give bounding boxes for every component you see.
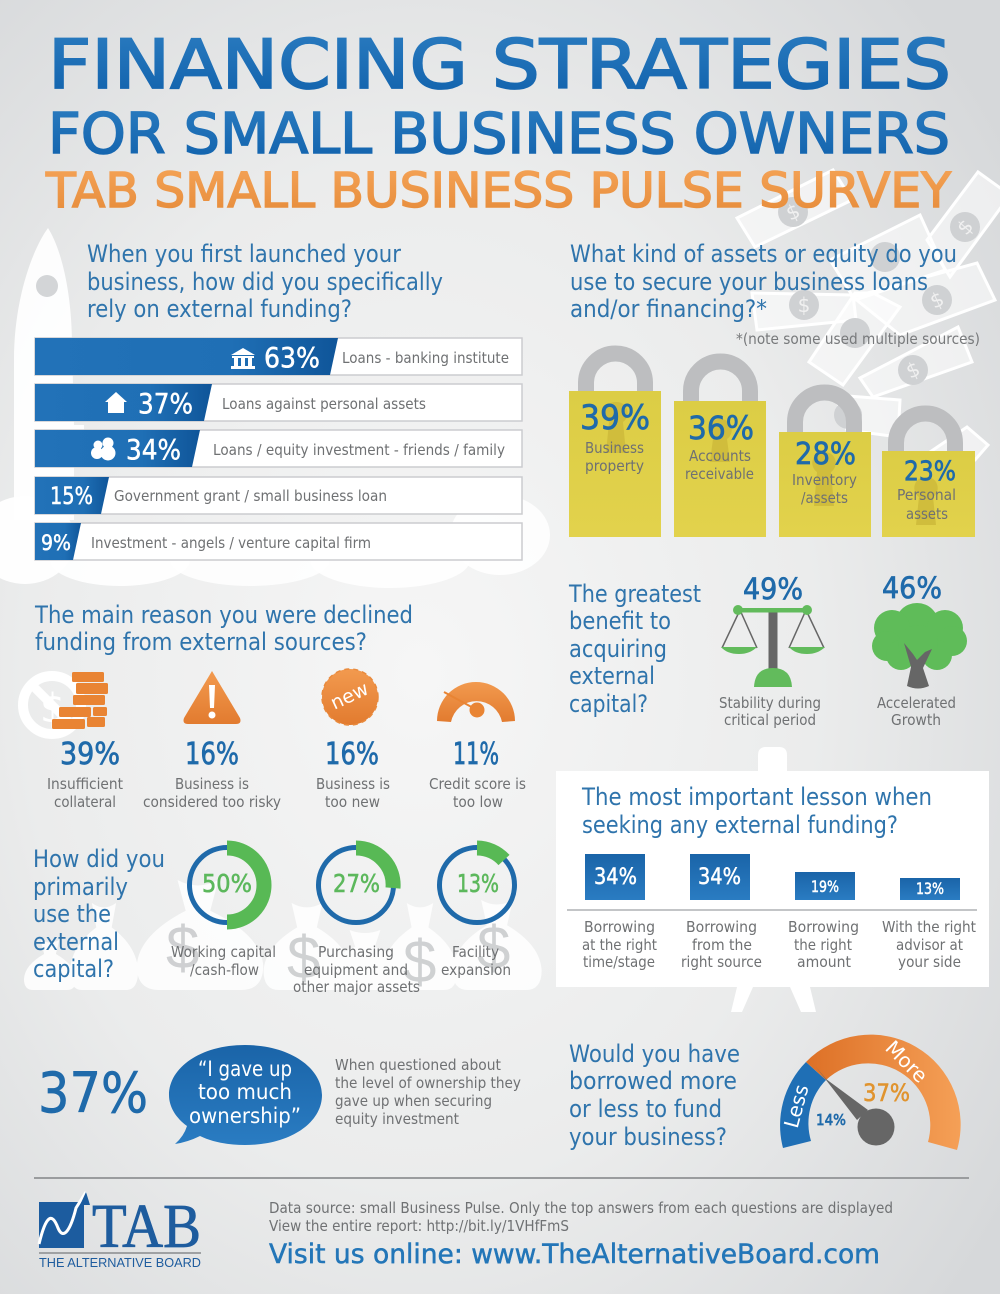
bar: 37%: 37% — [138, 387, 193, 420]
bar: 63%: Loans - banking institute — [342, 349, 509, 367]
padlock: 28% inventory: Inventory — [792, 471, 857, 489]
easel board legs — [731, 747, 816, 1012]
padlock: 23% personal assets — [882, 414, 975, 537]
speech bubble: ownership quote — [169, 1045, 322, 1145]
text block: ownership explanation: When questioned about — [335, 1056, 501, 1074]
padlock: 23% personal assets: assets — [906, 505, 948, 523]
bar: 34% right source — [681, 854, 762, 971]
panel: most important lesson: seeking any external funding? — [582, 811, 898, 839]
gauge: borrow more or less: 37% — [863, 1079, 910, 1107]
bar: 34%: 34% — [126, 433, 181, 466]
stat: credit score: 11% — [453, 737, 499, 772]
stat: too new: Business is — [316, 775, 390, 793]
bar: 34% right time: time/stage — [583, 953, 655, 971]
bar: 9% — [35, 523, 522, 560]
heading: borrowed more or less: your business? — [569, 1123, 727, 1151]
stat: too risky — [143, 671, 281, 811]
background illustration: money bags — [24, 880, 542, 995]
heading: reasons declined — [34, 601, 413, 656]
text block: ownership explanation: equity investment — [335, 1110, 459, 1128]
bar: 63%: 63% — [264, 341, 320, 374]
text block: ownership explanation: the level of ownership they — [335, 1074, 521, 1092]
donut: 27% purchasing equipment — [293, 848, 420, 996]
heading: use of external capital: capital? — [33, 955, 114, 983]
heading: use of external capital: use the — [33, 900, 111, 928]
donut: 27% purchasing equipment: equipment and — [304, 961, 408, 979]
footer: website link: Visit us online: www.TheAlternativeBoard.com — [269, 1239, 880, 1270]
heading: external funding question: business, how did you specifically — [87, 268, 443, 296]
background illustration: money bills: $ — [952, 214, 978, 240]
bar: 63% — [35, 338, 522, 375]
background illustration: rocket and clouds — [0, 228, 550, 588]
stat: growth 46%: 46% — [882, 571, 942, 605]
heading: external funding question: When you first launched your — [87, 240, 401, 268]
heading: borrowed more or less: Would you have — [569, 1040, 740, 1068]
stat: insufficient collateral — [23, 672, 123, 811]
padlock: 36% accounts receivable: Accounts — [689, 447, 751, 465]
background illustration: money bags: $ — [477, 914, 510, 981]
stat: growth 46%: Accelerated — [877, 694, 956, 712]
bar: 13% right advisor: advisor at — [896, 936, 963, 954]
heading: external funding question — [87, 240, 443, 323]
bar: 19% right amount: amount — [797, 953, 851, 971]
padlock: 39% business property: Business — [585, 439, 644, 457]
footer text: data source — [269, 1199, 893, 1235]
logo: The Alternative Board: THE ALTERNATIVE BOARD — [39, 1256, 201, 1270]
title: TAB SMALL BUSINESS PULSE SURVEY — [45, 163, 952, 219]
bar: 34% right source: 34% — [698, 865, 741, 890]
heading: assets or equity question: and/or financing?* — [570, 295, 767, 323]
speech bubble: ownership quote: ownership” — [189, 1104, 301, 1128]
logo: The Alternative Board — [39, 1192, 201, 1270]
bar: 13% right advisor: 13% — [916, 879, 944, 898]
heading: greatest benefit: benefit to — [569, 607, 671, 635]
stat: stability 49% — [719, 572, 825, 729]
bar: 34% right time: 34% — [594, 865, 637, 890]
icon: warning triangle — [184, 671, 240, 724]
bar: 13% right advisor: your side — [898, 953, 961, 971]
text block: ownership explanation — [335, 1056, 521, 1128]
heading: assets or equity question: What kind of assets or equity do you — [570, 240, 957, 268]
bar: 19% right amount: Borrowing — [788, 918, 859, 936]
heading: use of external capital: external — [33, 928, 119, 956]
stat: stability 49%: critical period — [724, 711, 816, 729]
bar: 15% — [35, 477, 522, 514]
logo: The Alternative Board: TAB — [92, 1193, 201, 1261]
stat: too risky: 16% — [185, 737, 239, 772]
donut: 27% purchasing equipment: other major assets — [293, 978, 420, 996]
donut: 13% facility expansion: expansion — [441, 961, 511, 979]
bar: 15%: 15% — [50, 482, 93, 510]
padlock: 28% inventory: 28% — [795, 437, 856, 472]
background illustration: money bills: $ — [926, 286, 948, 314]
background illustration: money bills: $ — [782, 198, 804, 226]
background illustration: money bills: $ — [902, 356, 924, 384]
heading: assets or equity question — [570, 240, 957, 323]
bar: 19% right amount — [788, 872, 859, 971]
padlock: 28% inventory — [779, 392, 871, 537]
donut: 50% working capital: 50% — [202, 869, 252, 898]
bar: 13% right advisor: With the right — [882, 918, 976, 936]
reasons declined stats — [23, 669, 526, 811]
icon: scales — [721, 605, 825, 687]
heading: use of external capital: primarily — [33, 873, 128, 901]
padlock: 39% business property: 39% — [580, 398, 650, 438]
stat: insufficient collateral: collateral — [54, 793, 116, 811]
title: FOR SMALL BUSINESS OWNERS — [48, 102, 950, 167]
background illustration: money bags: $ — [403, 928, 436, 995]
footer text: data source: Data source: small Business Pulse. Only the top answers from each questions are displayed — [269, 1199, 893, 1217]
donut: 13% facility expansion: Facility — [452, 943, 499, 961]
stat: too new: too new — [325, 793, 380, 811]
padlock: 23% personal assets: Personal — [897, 486, 956, 504]
heading: external funding question: rely on external funding? — [87, 295, 352, 323]
icon: new badge: new — [327, 678, 372, 714]
stat: credit score: too low — [453, 793, 503, 811]
donut: 27% purchasing equipment: Purchasing — [318, 943, 394, 961]
gauge: borrow more or less: More — [881, 1036, 933, 1088]
bar: 37%: Loans against personal assets — [222, 395, 426, 413]
bar: 37% — [35, 384, 522, 421]
heading: greatest benefit — [568, 580, 701, 718]
bar chart: external funding — [35, 338, 522, 560]
heading: greatest benefit: capital? — [569, 690, 648, 718]
bar: 19% right amount: 19% — [811, 877, 839, 896]
bar: 34% — [35, 430, 522, 467]
heading: borrowed more or less — [569, 1040, 740, 1151]
heading: reasons declined: The main reason you were declined — [34, 601, 413, 629]
bar: 34% right source: Borrowing — [686, 918, 757, 936]
bar: 9%: Investment - angels / venture capital firm — [91, 534, 371, 552]
bar: 34%: Loans / equity investment - friends / family — [213, 441, 505, 459]
panel: most important lesson — [556, 747, 989, 1012]
heading: reasons declined: funding from external sources? — [35, 628, 367, 656]
donut: 13% facility expansion: 13% — [457, 869, 499, 898]
padlock: 28% inventory: /assets — [801, 489, 848, 507]
padlock: 23% personal assets: 23% — [904, 456, 956, 487]
stat: stability 49%: 49% — [743, 572, 803, 606]
icon: tree — [872, 603, 967, 688]
title — [45, 26, 952, 219]
background illustration: money bags: $ — [287, 924, 320, 991]
bar: 15%: Government grant / small business loan — [114, 487, 387, 505]
bar: 34% right source: right source — [681, 953, 762, 971]
heading: greatest benefit: external — [569, 662, 655, 690]
icon: no money with bricks: $ — [40, 686, 65, 732]
padlock: 39% business property — [569, 354, 661, 537]
donut: 50% working capital: Working capital — [171, 943, 276, 961]
stat: stability 49%: Stability during — [719, 694, 821, 712]
heading: assets or equity question: use to secure your business loans — [570, 268, 928, 296]
donut: 27% purchasing equipment: 27% — [333, 869, 380, 898]
footer text: data source: View the entire report: http://bit.ly/1VHfFmS — [269, 1217, 569, 1235]
donut: 50% working capital: /cash-flow — [190, 961, 259, 979]
icon: speedometer — [437, 682, 515, 722]
gauge: borrow more or less: 14% — [816, 1111, 846, 1129]
background illustration: money bills — [737, 170, 1000, 460]
icon: new badge — [322, 669, 378, 725]
padlock: 36% accounts receivable: 36% — [688, 409, 754, 447]
stat: too new — [316, 669, 390, 811]
bar: 13% right advisor — [882, 878, 976, 971]
stat: growth 46% — [872, 571, 967, 729]
donut: 13% facility expansion — [440, 848, 514, 979]
padlock chart: assets — [569, 354, 975, 537]
heading: use of external capital — [33, 845, 165, 983]
speech bubble: ownership quote: “I gave up — [198, 1057, 292, 1081]
padlock: 36% accounts receivable: receivable — [685, 465, 754, 483]
heading: borrowed more or less: or less to fund — [569, 1095, 722, 1123]
donut charts: use of capital — [171, 848, 514, 996]
heading: use of external capital: How did you — [33, 845, 165, 873]
bar: 34% right time: at the right — [582, 936, 657, 954]
stat: credit score — [429, 682, 526, 811]
gauge: borrow more or less: Less — [779, 1082, 814, 1131]
bar: 19% right amount: the right — [794, 936, 852, 954]
background illustration: money bills: $ — [798, 293, 810, 317]
heading: greatest benefit: acquiring — [569, 635, 667, 663]
stat: insufficient collateral: 39% — [60, 737, 120, 772]
heading: greatest benefit: The greatest — [568, 580, 701, 608]
donut: 50% working capital — [171, 848, 276, 979]
stat: too risky: Business is — [175, 775, 249, 793]
panel: most important lesson: The most important lesson when — [581, 783, 932, 811]
stat: insufficient collateral: Insufficient — [47, 775, 123, 793]
speech bubble: ownership quote: too much — [198, 1080, 292, 1104]
gauge: borrow more or less — [779, 1035, 961, 1150]
footer divider — [34, 1177, 969, 1179]
padlock: 39% business property: property — [585, 457, 644, 475]
bar: 34% right time: Borrowing — [584, 918, 655, 936]
stat: too new: 16% — [325, 737, 379, 772]
heading: borrowed more or less: borrowed more — [569, 1067, 737, 1095]
text block: ownership explanation: gave up when securing — [335, 1092, 492, 1110]
stat: credit score: Credit score is — [429, 775, 526, 793]
stat: 37%: 37% — [38, 1061, 148, 1125]
background illustration: money bags: $ — [166, 914, 199, 981]
stat: too risky: considered too risky — [143, 793, 281, 811]
bar: 34% right time — [582, 854, 657, 971]
bar: 9%: 9% — [41, 531, 71, 555]
padlock: 36% accounts receivable — [674, 362, 766, 537]
bar: 34% right source: from the — [692, 936, 752, 954]
stat: growth 46%: Growth — [891, 711, 941, 729]
title: FINANCING STRATEGIES — [48, 26, 951, 105]
